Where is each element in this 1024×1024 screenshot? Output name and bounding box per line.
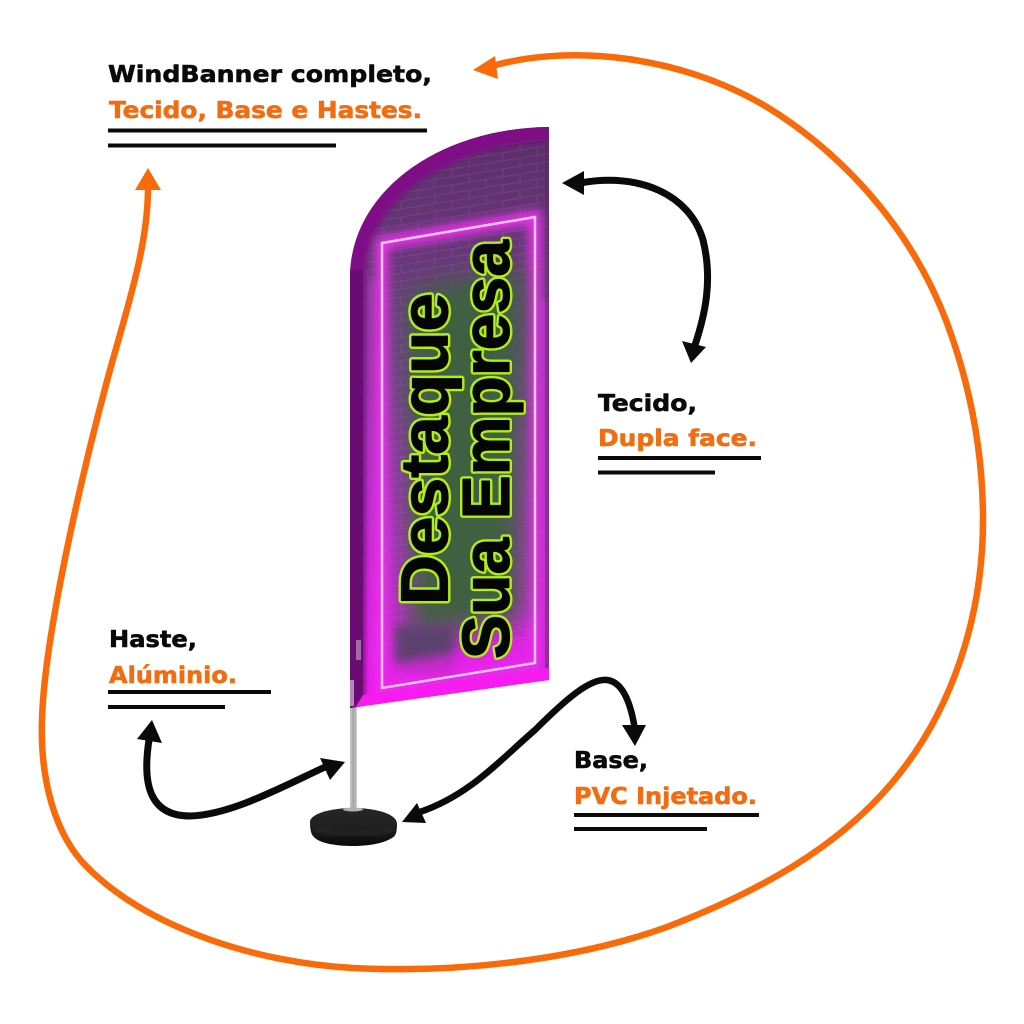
- label: base: PVC Injetado.: [574, 782, 757, 810]
- label: tecido: Tecido,: [598, 389, 697, 417]
- base: [310, 808, 397, 846]
- flag headline line 1: Destaque: [388, 293, 462, 605]
- label: haste: [108, 625, 271, 709]
- flag fabric: [350, 127, 549, 708]
- label: windbanner completo: [108, 60, 432, 148]
- flag small print: [350, 640, 361, 706]
- label: haste: Haste,: [109, 625, 197, 653]
- neon frame: [382, 217, 535, 688]
- pole: [350, 700, 357, 812]
- label: base: [574, 746, 759, 831]
- label: windbanner completo: WindBanner completo,: [108, 60, 432, 88]
- black arrow: base: [402, 680, 646, 823]
- flag banner: [350, 127, 549, 708]
- black arrow: haste: [137, 720, 345, 816]
- black arrow: tecido: [562, 171, 708, 363]
- flag headline line 1: Destaque: [388, 293, 462, 605]
- label: windbanner completo: Tecido, Base e Hastes.: [109, 96, 422, 124]
- label: tecido: [598, 389, 761, 474]
- flag headline line 2: Sua Empresa: [449, 239, 524, 659]
- label: tecido: Dupla face.: [598, 424, 757, 452]
- label: base: Base,: [574, 746, 648, 774]
- label: haste: Alúminio.: [109, 661, 237, 689]
- flag headline line 2: Sua Empresa: [449, 239, 524, 659]
